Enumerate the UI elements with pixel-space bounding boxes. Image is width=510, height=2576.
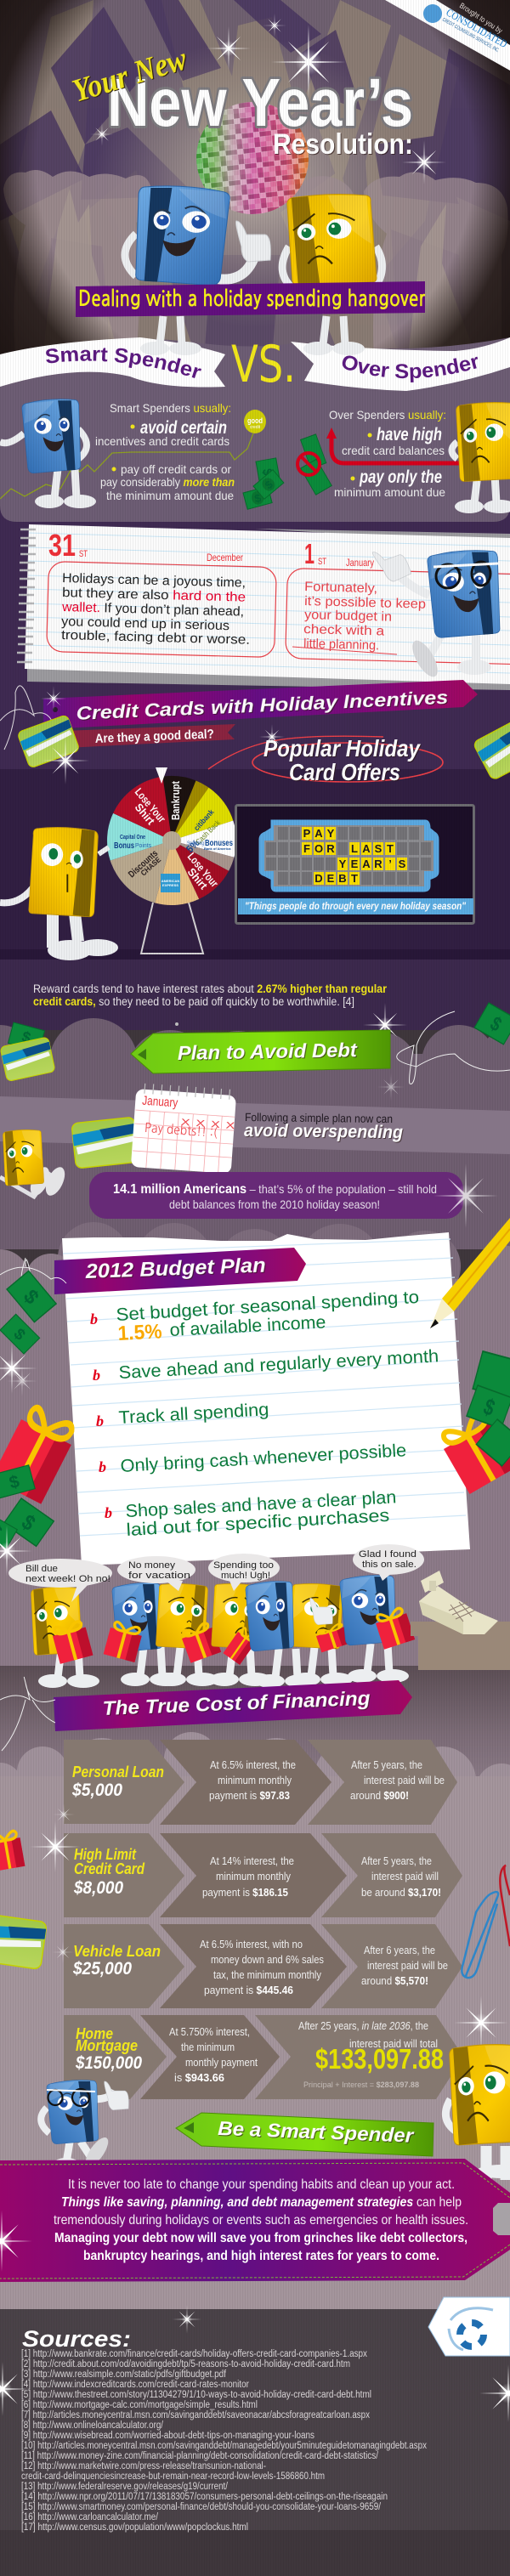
budget checklist: b bbox=[96, 1413, 104, 1430]
january date: ST bbox=[318, 557, 326, 567]
row: high limit credit card: payment is $186.15 bbox=[202, 1887, 288, 1899]
january note: check with a bbox=[303, 622, 385, 638]
icon: paper clips bbox=[462, 1865, 510, 1978]
notebook: december to january bbox=[17, 524, 510, 690]
stars in sources bbox=[0, 2305, 510, 2422]
smart spender text: incentives and credit cards bbox=[95, 434, 230, 448]
heading: popular holiday card offers: Popular Holiday bbox=[264, 735, 421, 761]
game board: pay for last year's debt: A bbox=[314, 827, 323, 840]
decorative gift tags bbox=[0, 686, 510, 781]
row: personal loan: around $900! bbox=[350, 1790, 409, 1802]
smart spender text bbox=[95, 401, 235, 502]
row: personal loan: minimum monthly bbox=[218, 1775, 292, 1786]
gifts and money right: $ bbox=[480, 1394, 498, 1422]
closing message banner: It is never too late to change your spending habits and clean up your act. bbox=[68, 2177, 455, 2192]
row: high limit credit card bbox=[64, 1833, 462, 1917]
section banner: be a smart spender bbox=[176, 2113, 434, 2156]
row: high limit credit card: After 5 years, the bbox=[361, 1855, 432, 1867]
reward cards note: Reward cards tend to have interest rates about 2.67% higher than regular bbox=[33, 982, 388, 995]
row: home mortgage: At 5.750% interest, bbox=[169, 2026, 250, 2038]
row: home mortgage: monthly payment bbox=[185, 2057, 258, 2069]
reward cards note bbox=[33, 982, 388, 1008]
game board: pay for last year's debt: ’ bbox=[388, 858, 392, 870]
budget checklist bbox=[90, 1288, 439, 1540]
game board: pay for last year's debt: "Things people do through every new holiday season" bbox=[245, 900, 466, 912]
sitting gold card bbox=[0, 1129, 69, 1198]
calendar: january: Pay debts!! :( bbox=[144, 1122, 218, 1140]
game board: pay for last year's debt: S bbox=[399, 858, 406, 870]
row: vehicle loan: tax, the minimum monthly bbox=[213, 1969, 322, 1981]
row: home mortgage: Mortgage bbox=[76, 2037, 138, 2054]
smart spender text: the minimum amount due bbox=[106, 489, 234, 502]
wheel labels: Points bbox=[135, 843, 151, 849]
credit card on calendar bbox=[71, 1117, 139, 1169]
stars bbox=[41, 686, 285, 784]
gifts and money left: $ bbox=[17, 1510, 40, 1536]
row: personal loan: $5,000 bbox=[71, 1781, 122, 1800]
sources: [9] http://www.wisebread.com/worried-about-debt-tips-on-managing-your-loans bbox=[21, 2431, 314, 2441]
star and ribbon decorations bbox=[175, 1003, 510, 1147]
game board: pay for last year's debt: B bbox=[338, 872, 347, 885]
row: high limit credit card: be around $3,170! bbox=[361, 1887, 441, 1899]
sources: [17] http://www.census.gov/population/www/popclockus.html bbox=[21, 2522, 248, 2533]
large sad gold card bbox=[445, 2045, 510, 2180]
december note bbox=[61, 571, 250, 648]
sources: [6] http://www.mortgage-calc.com/mortgage/simple_results.html bbox=[21, 2400, 258, 2410]
january note: little planning. bbox=[303, 637, 379, 653]
speech bubbles: Glad I found bbox=[359, 1549, 416, 1560]
sources: [5] http://www.thestreet.com/story/11304279/1/10-ways-to-avoid-holiday-credit-card-debt.html bbox=[21, 2390, 371, 2400]
sub banner: are they a good deal: Are they a good deal? bbox=[94, 727, 214, 746]
shocked gold card bbox=[0, 828, 118, 960]
sources: [7] http://articles.moneycentral.msn.com/savinganddebt/saveonacar/abcsforagreatcarloan.aspx bbox=[21, 2410, 370, 2420]
game board: pay for last year's debt: A bbox=[362, 842, 371, 855]
gifts and money left: $ bbox=[19, 1285, 43, 1309]
speech bubbles: for vacation bbox=[128, 1571, 190, 1581]
december date: December bbox=[207, 552, 243, 563]
wheel labels: Lose Your bbox=[133, 785, 168, 825]
icon: cash: $ bbox=[258, 467, 275, 476]
ribbon: over spender bbox=[291, 337, 510, 391]
budget plan paper bbox=[62, 1232, 470, 1565]
over spender text bbox=[329, 408, 446, 499]
january note bbox=[292, 580, 426, 654]
callout: 14.1 million americans bbox=[89, 1172, 463, 1219]
budget checklist: laid out for specific purchases bbox=[126, 1506, 390, 1540]
game board: pay for last year's debt: F bbox=[303, 842, 310, 855]
row: personal loan: After 5 years, the bbox=[351, 1759, 422, 1771]
row: high limit credit card: minimum monthly bbox=[216, 1871, 292, 1882]
speech bubbles: Spending too bbox=[213, 1560, 274, 1571]
wheel labels: Bankrupt bbox=[169, 780, 182, 820]
over spender text: pay only the bbox=[359, 467, 442, 487]
calendar: january bbox=[131, 1083, 237, 1174]
prize wheel bbox=[107, 767, 236, 954]
game board: pay for last year's debt: E bbox=[327, 872, 335, 885]
smart card with glasses bbox=[372, 542, 500, 681]
budget checklist: Set budget for seasonal spending to bbox=[116, 1288, 420, 1325]
table: cost of financing rows bbox=[64, 1740, 463, 2099]
wheel labels: Bonuses bbox=[205, 839, 233, 848]
sparkle stars bbox=[90, 14, 446, 184]
smart spender text: pay off credit cards or bbox=[121, 462, 231, 476]
game board: pay for last year's debt bbox=[236, 806, 474, 923]
budget checklist: b bbox=[90, 1311, 98, 1328]
game board: pay for last year's debt: P bbox=[303, 827, 311, 840]
december note: but they are also hard on the bbox=[62, 586, 246, 605]
wheel labels: CHASE bbox=[139, 855, 162, 877]
game board: pay for last year's debt: T bbox=[387, 842, 394, 855]
closing message banner: bankruptcy hearings, and high interest rates for years to come. bbox=[83, 2249, 439, 2263]
light band bbox=[0, 1096, 510, 1154]
budget checklist: Shop sales and have a clear plan bbox=[125, 1487, 397, 1521]
row: vehicle loan: payment is $445.46 bbox=[204, 1984, 293, 1996]
calendar: january: x x x x bbox=[180, 1116, 235, 1131]
background: hero spotlights bbox=[0, 0, 510, 361]
december note: Holidays can be a joyous time, bbox=[62, 571, 246, 591]
wheel labels: citibank bbox=[192, 807, 216, 832]
budget checklist: b bbox=[99, 1458, 106, 1475]
wheel labels: Bank of America bbox=[204, 846, 231, 851]
budget checklist: 1.5% bbox=[117, 1320, 162, 1345]
sources: [1] http://www.bankrate.com/finance/credit-cards/holiday-offers-credit-card-companies-1.aspx bbox=[21, 2349, 367, 2359]
callout: 14.1 million americans: debt balances from the 2010 holiday season! bbox=[169, 1197, 380, 1211]
title: Your New bbox=[68, 41, 191, 110]
budget checklist: b bbox=[105, 1504, 112, 1521]
row: vehicle loan: At 6.5% interest, with no bbox=[200, 1939, 303, 1950]
subtitle banner bbox=[76, 281, 426, 317]
hero edge shading bbox=[0, 0, 510, 361]
row: vehicle loan: money down and 6% sales bbox=[211, 1954, 324, 1966]
row: home mortgage: After 25 years, in late 2036, the bbox=[298, 2020, 428, 2032]
wheel labels: Capital One bbox=[120, 835, 145, 841]
growth line bbox=[0, 433, 253, 499]
row: high limit credit card: At 14% interest, the bbox=[210, 1855, 294, 1867]
money and tags near plan heading: $ bbox=[486, 1012, 506, 1036]
over spender text: have high bbox=[377, 425, 442, 444]
gifts and money left: $ bbox=[8, 1472, 22, 1493]
avoid overspending text: Following a simple plan now can bbox=[245, 1111, 393, 1125]
row: vehicle loan: $25,000 bbox=[72, 1959, 132, 1979]
wheel labels: Discounts bbox=[127, 848, 160, 880]
panel: smart vs over background bbox=[0, 337, 510, 522]
game board: pay for last year's debt: D bbox=[314, 872, 323, 885]
queue of card characters bbox=[31, 1576, 415, 1688]
row: vehicle loan bbox=[64, 1924, 462, 2008]
closing message banner: Things like saving, planning, and debt management strategies can help bbox=[61, 2195, 462, 2210]
icon: prohibited money bbox=[298, 434, 332, 495]
reward cards note: credit cards, so they need to be paid off quickly to be worthwhile. [4] bbox=[33, 995, 354, 1008]
sources: [13] http://www.federalreserve.gov/releases/g19/current/ bbox=[21, 2482, 229, 2492]
smart spender text: Smart Spenders usually: bbox=[110, 401, 231, 415]
section banner: plan to avoid debt bbox=[131, 1030, 390, 1073]
game board: pay for last year's debt: R bbox=[374, 858, 382, 870]
wheel labels: Bonus bbox=[114, 841, 134, 851]
subtitle banner: Dealing with a holiday spending hangover bbox=[78, 288, 426, 309]
row: personal loan bbox=[64, 1740, 457, 1825]
row: vehicle loan: After 6 years, the bbox=[364, 1945, 435, 1956]
row: high limit credit card: $8,000 bbox=[73, 1878, 123, 1898]
sources: [14] http://www.npr.org/2011/07/17/138183057/consumers-personal-debt-ceilings-on-the-riseagain bbox=[21, 2492, 388, 2502]
section banner: true cost of financing: The True Cost of Financing bbox=[102, 1687, 371, 1719]
wheel labels: EXPRESS bbox=[162, 883, 178, 887]
row: personal loan: At 6.5% interest, the bbox=[210, 1759, 296, 1771]
speech bubbles: much! Ugh! bbox=[221, 1571, 270, 1581]
crowd silhouettes bbox=[3, 170, 508, 357]
game board: pay for last year's debt: Y bbox=[339, 858, 347, 870]
smart card with glasses and thumb bbox=[41, 2081, 128, 2170]
arrow: red overspending bbox=[326, 427, 463, 463]
sources: [2] http://credit.about.com/od/avoidingdebt/tp/5-reasons-to-avoid-holiday-credit-card.htm bbox=[21, 2359, 350, 2369]
title: New Year’s bbox=[107, 65, 413, 140]
sources: [15] http://www.smartmoney.com/personal-finance/debt/should-you-consolidate-your-loans-9659/ bbox=[21, 2502, 382, 2512]
section banner: be a smart spender: Be a Smart Spender bbox=[218, 2117, 415, 2147]
game board: pay for last year's debt: L bbox=[351, 842, 358, 855]
row: home mortgage: Principal + Interest = $283,097.88 bbox=[303, 2081, 419, 2090]
disco ball bbox=[196, 102, 309, 214]
game board: pay for last year's debt: T bbox=[351, 872, 358, 885]
row: personal loan: interest paid will be bbox=[364, 1775, 445, 1786]
december note: wallet. If you don’t plan ahead, bbox=[61, 600, 244, 620]
wheel labels: 5% bbox=[184, 837, 202, 855]
wheel labels: Cash Back bbox=[194, 818, 222, 846]
icon: good credit balloon bbox=[244, 410, 266, 433]
sources: Sources: bbox=[22, 2326, 131, 2352]
left side decorations bbox=[0, 1677, 81, 1969]
row: personal loan: Personal Loan bbox=[72, 1764, 164, 1781]
game board: pay for last year's debt: O bbox=[314, 842, 323, 855]
title bbox=[68, 41, 413, 161]
game board: pay for last year's debt: A bbox=[362, 858, 371, 870]
heading: popular holiday card offers: Card Offers bbox=[289, 759, 400, 785]
hero legs bbox=[140, 316, 365, 355]
icon: cash: $ bbox=[253, 491, 263, 505]
icon: good credit balloon: credit bbox=[250, 425, 261, 430]
january date: January bbox=[346, 557, 374, 569]
game board: pay for last year's debt: S bbox=[375, 842, 382, 855]
counter and cash register bbox=[411, 1571, 510, 1670]
section banner: credit cards with holiday incentives bbox=[43, 680, 478, 729]
wheel labels: Spending bbox=[187, 841, 204, 846]
wheel labels: Shirt bbox=[133, 801, 158, 828]
wheel labels bbox=[114, 780, 233, 892]
speech bubbles bbox=[8, 1544, 424, 1602]
over spender text: minimum amount due bbox=[334, 485, 445, 499]
smart card character panel bbox=[0, 399, 96, 508]
december date bbox=[48, 528, 243, 563]
ribbon: smart spender bbox=[0, 337, 225, 388]
december note: you could end up in serious bbox=[61, 614, 230, 633]
row: high limit credit card: interest paid will bbox=[371, 1871, 439, 1882]
section banner: credit cards with holiday incentives: Credit Cards with Holiday Incentives bbox=[76, 687, 449, 724]
speech bubbles: Bill due bbox=[26, 1564, 58, 1574]
smart spender text: pay considerably more than bbox=[100, 475, 235, 489]
row: personal loan: payment is $97.83 bbox=[209, 1790, 290, 1802]
sources: [12] http://www.marketwire.com/press-release/transunion-national- bbox=[21, 2461, 266, 2471]
avoid overspending text bbox=[244, 1111, 403, 1142]
hero smart card character bbox=[125, 186, 270, 286]
january date bbox=[304, 538, 374, 569]
sources: [8] http://www.onlineloancalculator.org/ bbox=[21, 2420, 164, 2431]
logo ribbon bbox=[385, 0, 510, 71]
section banner: 2012 budget plan: 2012 Budget Plan bbox=[84, 1254, 266, 1283]
section banner: true cost of financing bbox=[54, 1680, 412, 1731]
row: home mortgage: $133,097.88 bbox=[315, 2043, 444, 2075]
budget checklist: b bbox=[93, 1367, 100, 1384]
over spender card character bbox=[452, 402, 510, 513]
row: vehicle loan: Vehicle Loan bbox=[73, 1943, 161, 1960]
december date: 31 bbox=[48, 528, 76, 563]
budget checklist: Only bring cash whenever possible bbox=[120, 1441, 407, 1476]
row: vehicle loan: around $5,570! bbox=[361, 1975, 428, 1987]
ribbon: smart spender: Smart Spender bbox=[46, 348, 201, 378]
wheel labels: Shirt bbox=[185, 865, 211, 892]
sources: [10] http://articles.moneycentral.msn.com/savinganddebt/managedebt/your5minuteguidetomanagingdebt.aspx bbox=[21, 2441, 427, 2451]
hero over spender card character bbox=[282, 195, 382, 289]
game board: pay for last year's debt: R bbox=[326, 842, 335, 855]
row: home mortgage: interest paid will total bbox=[349, 2038, 438, 2050]
budget checklist: Track all spending bbox=[118, 1400, 269, 1428]
money and tags near plan heading: $ bbox=[20, 1028, 32, 1046]
over spender text: credit card balances bbox=[342, 444, 445, 457]
december date: ST bbox=[79, 549, 88, 559]
january date: 1 bbox=[304, 538, 314, 569]
lower dark purple section bbox=[0, 501, 510, 1030]
ribbon: over spender: Over Spender bbox=[342, 355, 478, 382]
december note: trouble, facing debt or worse. bbox=[61, 628, 250, 648]
versus label: VS. bbox=[231, 335, 296, 394]
wheel labels: Lose Your bbox=[185, 850, 221, 890]
over spender text: Over Spenders usually: bbox=[329, 408, 446, 422]
title: Resolution: bbox=[273, 128, 413, 161]
row: home mortgage: the minimum bbox=[181, 2041, 235, 2053]
row: high limit credit card: High Limit bbox=[74, 1846, 137, 1863]
heading: popular holiday card offers bbox=[208, 735, 443, 785]
closing message banner bbox=[0, 2159, 510, 2282]
january note: Fortunately, bbox=[304, 580, 377, 596]
sources: [16] http://www.carloancalculator.me/ bbox=[21, 2512, 159, 2522]
sources: [4] http://www.indexcreditcards.com/credit-card-rates-monitor bbox=[21, 2380, 249, 2390]
gifts and money left bbox=[0, 1258, 79, 1577]
section banner: 2012 budget plan bbox=[54, 1248, 306, 1294]
game board: pay for last year's debt: E bbox=[351, 858, 359, 870]
speech bubbles: No money bbox=[128, 1560, 176, 1571]
row: vehicle loan: interest paid will be bbox=[367, 1960, 448, 1972]
budget checklist: of available income bbox=[169, 1312, 326, 1340]
pencil bbox=[430, 1218, 510, 1328]
speech bubbles: this on sale. bbox=[362, 1560, 416, 1570]
gifts and money left: $ bbox=[10, 1325, 30, 1344]
sub banner: are they a good deal bbox=[64, 724, 235, 748]
january note: your budget in bbox=[304, 608, 392, 625]
game board: pay for last year's debt: Y bbox=[327, 827, 335, 840]
january note: it’s possible to keep bbox=[304, 594, 426, 612]
row: home mortgage: is $943.66 bbox=[174, 2072, 224, 2084]
callout: 14.1 million americans: 14.1 million Americans – that’s 5% of the population – still hold bbox=[113, 1182, 437, 1197]
avoid overspending text: avoid overspending bbox=[244, 1121, 403, 1142]
icon: cash: $ bbox=[263, 478, 275, 491]
gifts and money right bbox=[437, 1351, 510, 1494]
row: high limit credit card: Credit Card bbox=[74, 1860, 145, 1877]
row: home mortgage bbox=[64, 2015, 463, 2099]
wheel labels: AMERICAN bbox=[162, 879, 179, 883]
calendar: january: January bbox=[142, 1094, 178, 1111]
row: home mortgage: $150,000 bbox=[75, 2053, 142, 2073]
section banner: plan to avoid debt: Plan to Avoid Debt bbox=[178, 1039, 358, 1064]
sources: [3] http://www.realsimple.com/static/pdfs/giftbudget.pdf bbox=[21, 2369, 227, 2380]
icon: cash bbox=[243, 458, 284, 509]
sources: [11] http://www.money-zine.com/financial-planning/debt-consolidation/credit-card-debt-statistics/ bbox=[21, 2451, 379, 2461]
icon: good credit balloon: good bbox=[247, 416, 263, 425]
money and tags near plan heading bbox=[0, 1003, 510, 1082]
sources: credit-card-delinquenciesincrease-but-remain-near-record-low-levels-1586860.htm bbox=[21, 2471, 325, 2482]
logo tag bbox=[428, 2297, 510, 2356]
budget checklist: Save ahead and regularly every month bbox=[118, 1346, 439, 1383]
speech bubbles: next week! Oh no! bbox=[26, 1574, 110, 1584]
smart spender text: avoid certain bbox=[140, 418, 227, 438]
row: home mortgage: Home bbox=[76, 2025, 113, 2042]
sources bbox=[21, 2326, 427, 2533]
